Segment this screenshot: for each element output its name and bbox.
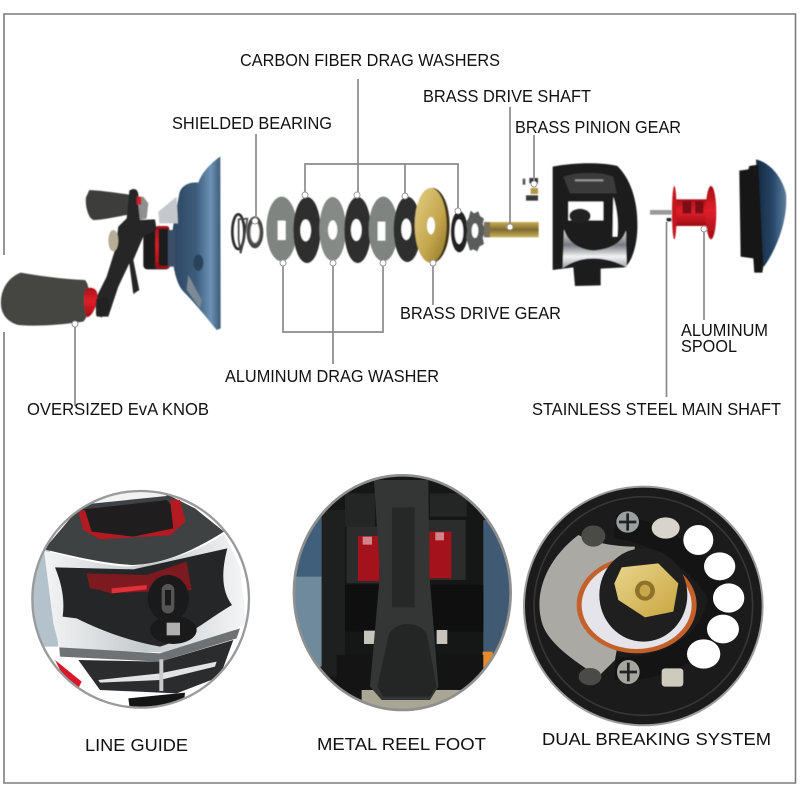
label: oversized EVA knob: OVERSIZED EvA KNOB (27, 399, 209, 419)
icon: brass pinion gear (523, 178, 538, 201)
label: brass pinion gear: BRASS PINION GEAR (515, 117, 681, 137)
top white sliver (92, 492, 166, 504)
dark window (55, 548, 232, 647)
label: brass drive gear: BRASS DRIVE GEAR (400, 303, 561, 323)
red window right (427, 520, 466, 580)
icon: star gear (466, 211, 486, 251)
label: aluminum spool: ALUMINUM (681, 320, 768, 340)
inner white bearing area (577, 557, 697, 653)
icon: shielded bearing (247, 216, 263, 248)
icon: main body side plate (172, 157, 221, 330)
orange tab (483, 652, 493, 670)
icon: carbon washer 1 (293, 197, 321, 263)
icon: snap ring (232, 214, 247, 253)
foot (128, 692, 185, 706)
red reflection (87, 562, 192, 593)
blue-gray body at left (34, 550, 58, 647)
line: carbon fiber drag washers (302, 79, 461, 214)
line: shielded bearing (252, 134, 258, 224)
icon: star drag stack (143, 226, 175, 269)
white gaps (364, 630, 375, 644)
icon: body engraved mark (187, 275, 202, 308)
label: aluminum spool (681, 320, 768, 356)
lower grille (78, 640, 233, 693)
central metal foot (370, 480, 438, 700)
chrome lip (59, 628, 240, 662)
icon: reel frame (553, 163, 637, 286)
small screws on plate (581, 525, 605, 547)
black bracket (616, 656, 617, 657)
label: shielded bearing: SHIELDED BEARING (172, 113, 332, 133)
icon: small black washer (451, 211, 468, 252)
red spool reflection (78, 499, 186, 539)
icon: oversized EVA knob (1, 273, 110, 326)
eyelet (148, 575, 197, 644)
label: aluminum spool: SPOOL (681, 336, 737, 356)
icon: chrome line guide edge (158, 197, 178, 223)
blue body right (483, 520, 510, 655)
icon: side cover (739, 159, 786, 273)
label: aluminum drag washer: ALUMINUM DRAG WASHER (225, 366, 439, 386)
label: brass drive shaft: BRASS DRIVE SHAFT (423, 86, 591, 106)
reel handle and main body (1, 157, 263, 330)
line: aluminum spool (701, 226, 707, 320)
icon: handle arm (95, 189, 157, 317)
silver plate (539, 535, 635, 677)
caption: dual breaking system: DUAL BREAKING SYSTEM (542, 729, 771, 749)
right-hand reel parts (523, 159, 786, 286)
red window left (347, 527, 380, 583)
line: brass pinion gear (531, 135, 537, 187)
bottom bracket screw (617, 660, 640, 684)
icon: carbon washer 2 (344, 197, 371, 263)
caption: line guide: LINE GUIDE (85, 735, 188, 755)
dark band (44, 495, 224, 565)
icon: carbon washer 3 (394, 197, 421, 262)
chrome frame (44, 534, 247, 653)
blue body left (296, 516, 322, 667)
caption: metal reel foot: METAL REEL FOOT (317, 734, 486, 754)
line: brass drive gear (430, 260, 436, 305)
icon: brass drive shaft (484, 222, 539, 237)
icon: main shaft pin (650, 210, 672, 221)
top dark recess (83, 500, 174, 536)
line: aluminum drag washer (280, 260, 386, 364)
label: stainless steel main shaft: STAINLESS STEEL MAIN SHAFT (532, 399, 781, 419)
line: stainless steel main shaft (666, 222, 668, 397)
upper side panels (345, 493, 375, 527)
brass nut (614, 563, 678, 617)
line: brass drive shaft (507, 107, 513, 230)
washer stack (266, 188, 539, 263)
icon: aluminum washer 1 (266, 197, 297, 261)
panel: dual braking system detail (524, 487, 763, 725)
lower mechanism (337, 655, 484, 676)
left pillar (322, 510, 345, 677)
label: carbon fiber drag washers: CARBON FIBER DRAG WASHERS (240, 50, 500, 70)
black cup (599, 548, 687, 642)
callout lines (72, 79, 707, 406)
pale foot base (362, 690, 460, 709)
outer ring highlight (534, 497, 753, 715)
icon: aluminum spool (672, 186, 716, 239)
icon: aluminum washer 3 (369, 197, 398, 261)
line: EVA knob (72, 321, 78, 406)
lower black block (483, 585, 484, 632)
icon: aluminum washer 2 (319, 197, 346, 261)
panel: line guide detail (30, 490, 249, 710)
brake holes (652, 517, 744, 687)
panel: metal reel foot detail (293, 475, 512, 713)
icon: body port hole (193, 254, 203, 271)
top bracket screw (616, 511, 639, 533)
red strip (55, 660, 82, 688)
icon: brass drive gear (415, 188, 450, 263)
icon: small handle knob (86, 190, 132, 220)
